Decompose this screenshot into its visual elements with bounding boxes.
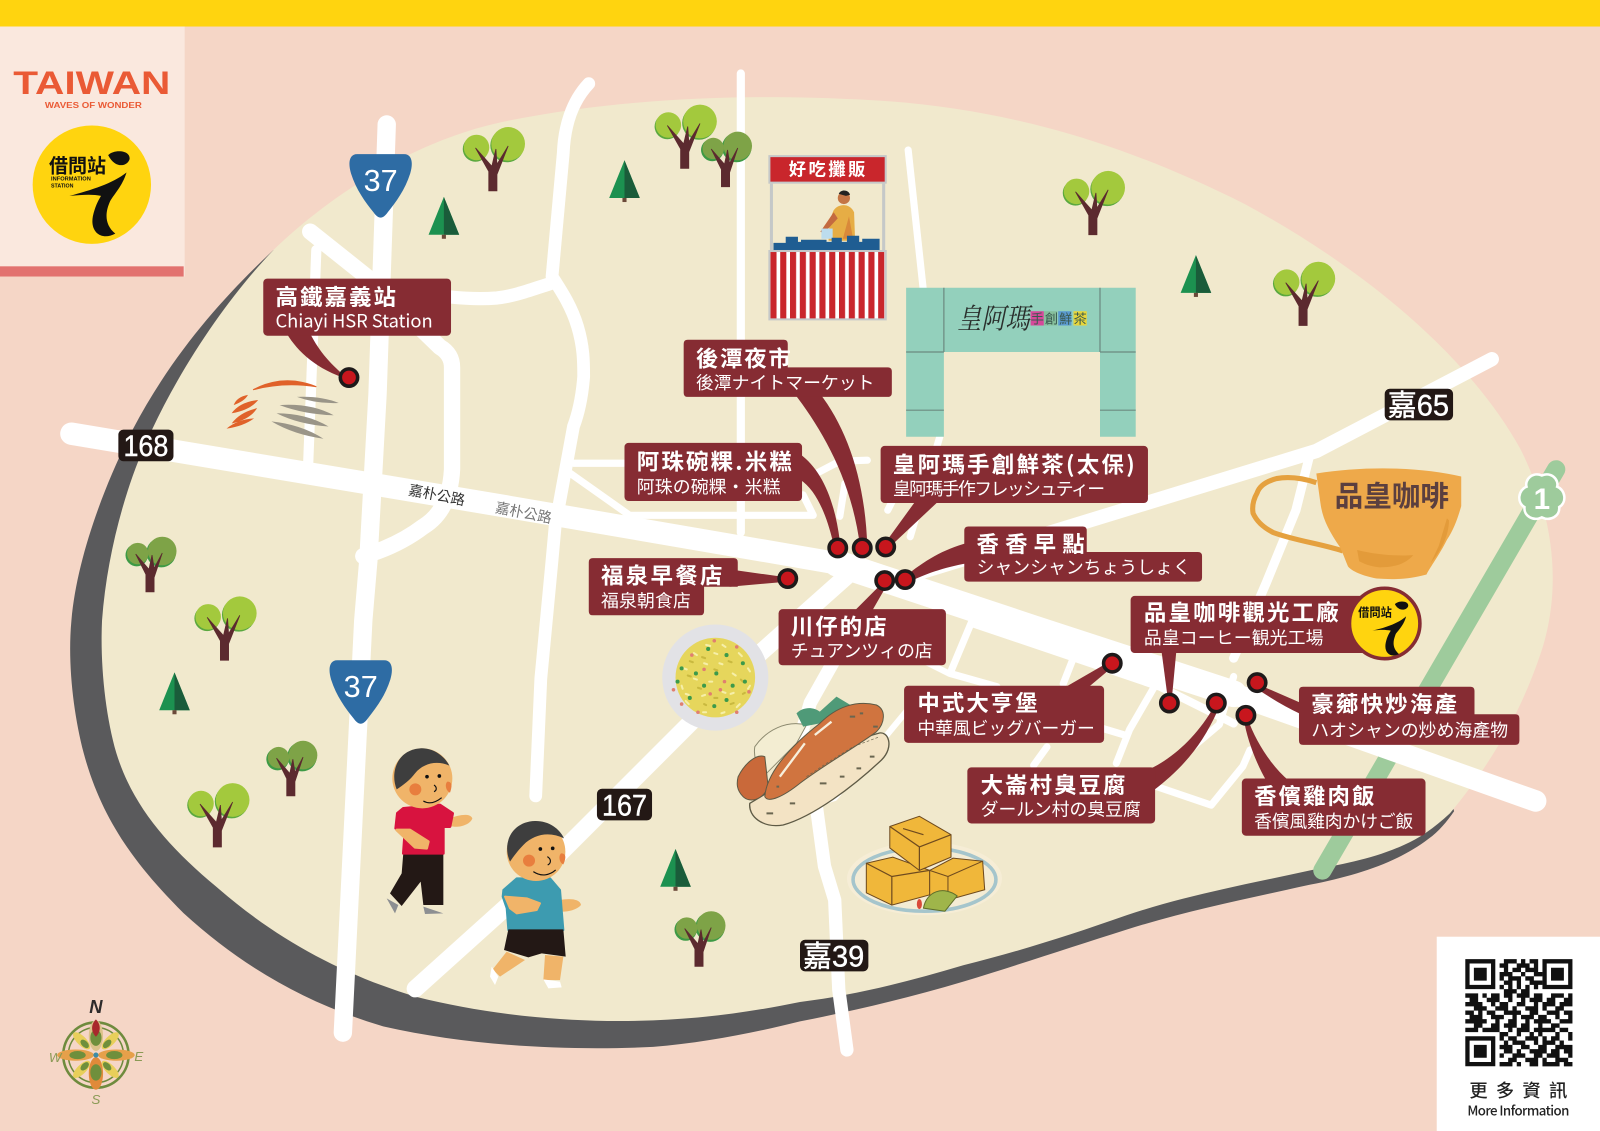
icon: information station: 借問站	[1358, 603, 1392, 620]
callout: Chuanzai shop: 川仔的店	[791, 610, 887, 642]
compass: W	[49, 1050, 63, 1065]
logo panel	[0, 27, 185, 277]
callout: Haoxiang seafood: ハオシャンの炒め海產物	[1311, 717, 1508, 743]
compass: E	[134, 1049, 143, 1064]
tea shop arch: 皇阿瑪	[957, 297, 1033, 338]
branch roads	[570, 453, 1310, 805]
stinky tofu plate	[847, 816, 1002, 915]
TAIWAN logo: WAVES OF WONDER	[45, 100, 143, 110]
child in blue shirt	[490, 821, 581, 988]
map land with grey edge	[70, 97, 1553, 1048]
callout: Chinese style big burger	[904, 655, 1121, 743]
road loop near HSR	[310, 232, 550, 556]
road name labels	[407, 479, 554, 528]
road sign 168: 168	[123, 430, 168, 463]
information station badge: INFORMATION	[51, 177, 91, 183]
tea shop arch: 手創鮮茶	[1031, 308, 1087, 327]
child in red shirt	[387, 748, 472, 914]
information station badge: 借問站	[49, 150, 106, 178]
road 167	[415, 571, 852, 989]
road 1 green	[1322, 469, 1556, 870]
fried rice plate	[662, 624, 768, 731]
callout: Chiayi HSR Station	[263, 279, 451, 386]
compass: N	[89, 996, 103, 1017]
coffee cup	[1253, 468, 1461, 579]
callout: Chuanzai shop: チュアンツィの店	[791, 637, 933, 663]
road sign 37 north: 37	[364, 164, 398, 198]
callout: Houtan night market	[684, 340, 892, 557]
coffee cup: 品皇咖啡	[1335, 474, 1449, 515]
road sign 1	[1519, 474, 1564, 519]
information station badge: STATION	[51, 184, 73, 190]
callout: Chiayi HSR Station: Chiayi HSR Station	[276, 308, 433, 334]
road sign 37 south: 37	[344, 670, 378, 704]
callout: Huangama tea	[877, 446, 1148, 556]
QR caption	[1467, 1077, 1569, 1119]
food stall	[769, 156, 886, 319]
callout: Houtan night market: 後潭夜市	[696, 341, 791, 373]
callout: Fuquan breakfast	[589, 558, 796, 615]
compass	[49, 996, 143, 1107]
TAIWAN logo	[13, 64, 170, 110]
road sign 1: 1	[1534, 483, 1550, 516]
callout: Chinese style big burger: 中式大亨堡	[917, 686, 1038, 718]
QR caption: 更多資訊	[1469, 1077, 1567, 1103]
icon: information station	[1349, 588, 1420, 659]
callout: Dalun village stinky tofu	[967, 694, 1225, 823]
callout: Xiangbin chicken rice	[1237, 707, 1426, 836]
callout: Xiangxiang breakfast	[896, 527, 1202, 588]
callout: Pinhuang coffee factory: 品皇コーヒー観光工場	[1144, 624, 1324, 650]
callout: Pinhuang coffee factory: 品皇咖啡觀光工廠	[1144, 595, 1339, 627]
road sign 37 north	[349, 154, 412, 218]
thin north road	[737, 73, 745, 533]
road sign 37 south	[330, 660, 392, 724]
callout: Huangama tea: 皇阿瑪手創鮮茶(太保)	[893, 447, 1135, 479]
central north road	[536, 84, 589, 796]
stall vendor	[820, 191, 855, 241]
callout: Huangama tea: 皇阿瑪手作フレッシュティー	[893, 475, 1105, 501]
TAIWAN logo: TAIWAN	[13, 64, 170, 101]
QR caption: More Information	[1467, 1100, 1569, 1119]
callout: Chinese style big burger: 中華風ビッグバーガー	[917, 715, 1095, 741]
callout: Azhu wan-kui and rice cake: 阿珠碗粿.米糕	[637, 444, 792, 476]
road jia 65	[923, 359, 1492, 571]
callout: Azhu wan-kui and rice cake	[624, 443, 846, 557]
callout: Chiayi HSR Station: 高鐵嘉義站	[276, 280, 396, 312]
callout: Xiangbin chicken rice: 香儐雞肉飯	[1254, 779, 1374, 811]
callout: Fuquan breakfast: 福泉朝食店	[601, 587, 691, 613]
road sign jia 65: 嘉65	[1388, 389, 1449, 422]
callout: Houtan night market: 後潭ナイトマーケット	[696, 369, 874, 395]
callout: Haoxiang seafood: 豪薌快炒海產	[1311, 687, 1457, 719]
road sign 167: 167	[602, 789, 647, 822]
road name labels: 嘉朴公路	[494, 496, 554, 528]
trees	[126, 105, 1335, 966]
road sign jia 39: 嘉39	[803, 940, 864, 973]
HSR logo	[227, 381, 339, 439]
road jia 39	[801, 638, 847, 1050]
callout: Xiangbin chicken rice: 香儐風雞肉かけご飯	[1254, 808, 1413, 834]
callout: Fuquan breakfast: 福泉早餐店	[601, 559, 722, 591]
hot dog burger	[737, 697, 889, 826]
tea shop arch	[906, 288, 1136, 437]
QR panel	[1437, 937, 1600, 1131]
callout: Xiangxiang breakfast: 香香早點	[977, 527, 1085, 559]
callout: Dalun village stinky tofu: 大崙村臭豆腐	[981, 768, 1126, 800]
callout: Xiangxiang breakfast: シャンシャンちょうしょく	[977, 553, 1191, 579]
road 37	[343, 124, 387, 1033]
callout: Pinhuang coffee factory	[1131, 588, 1420, 712]
food stall: 好吃攤販	[789, 156, 866, 181]
information station badge	[33, 126, 151, 244]
callout: Dalun village stinky tofu: ダールン村の臭豆腐	[981, 795, 1141, 821]
callout: Chuanzai shop	[779, 572, 946, 665]
compass: S	[91, 1092, 100, 1107]
QR code	[1465, 961, 1572, 1064]
callout: Azhu wan-kui and rice cake: 阿珠の碗粿・米糕	[637, 473, 781, 499]
road 168 main	[71, 434, 1536, 801]
callout: Haoxiang seafood	[1248, 674, 1519, 745]
top yellow bar	[0, 0, 1600, 27]
road name labels: 嘉朴公路	[407, 479, 467, 510]
